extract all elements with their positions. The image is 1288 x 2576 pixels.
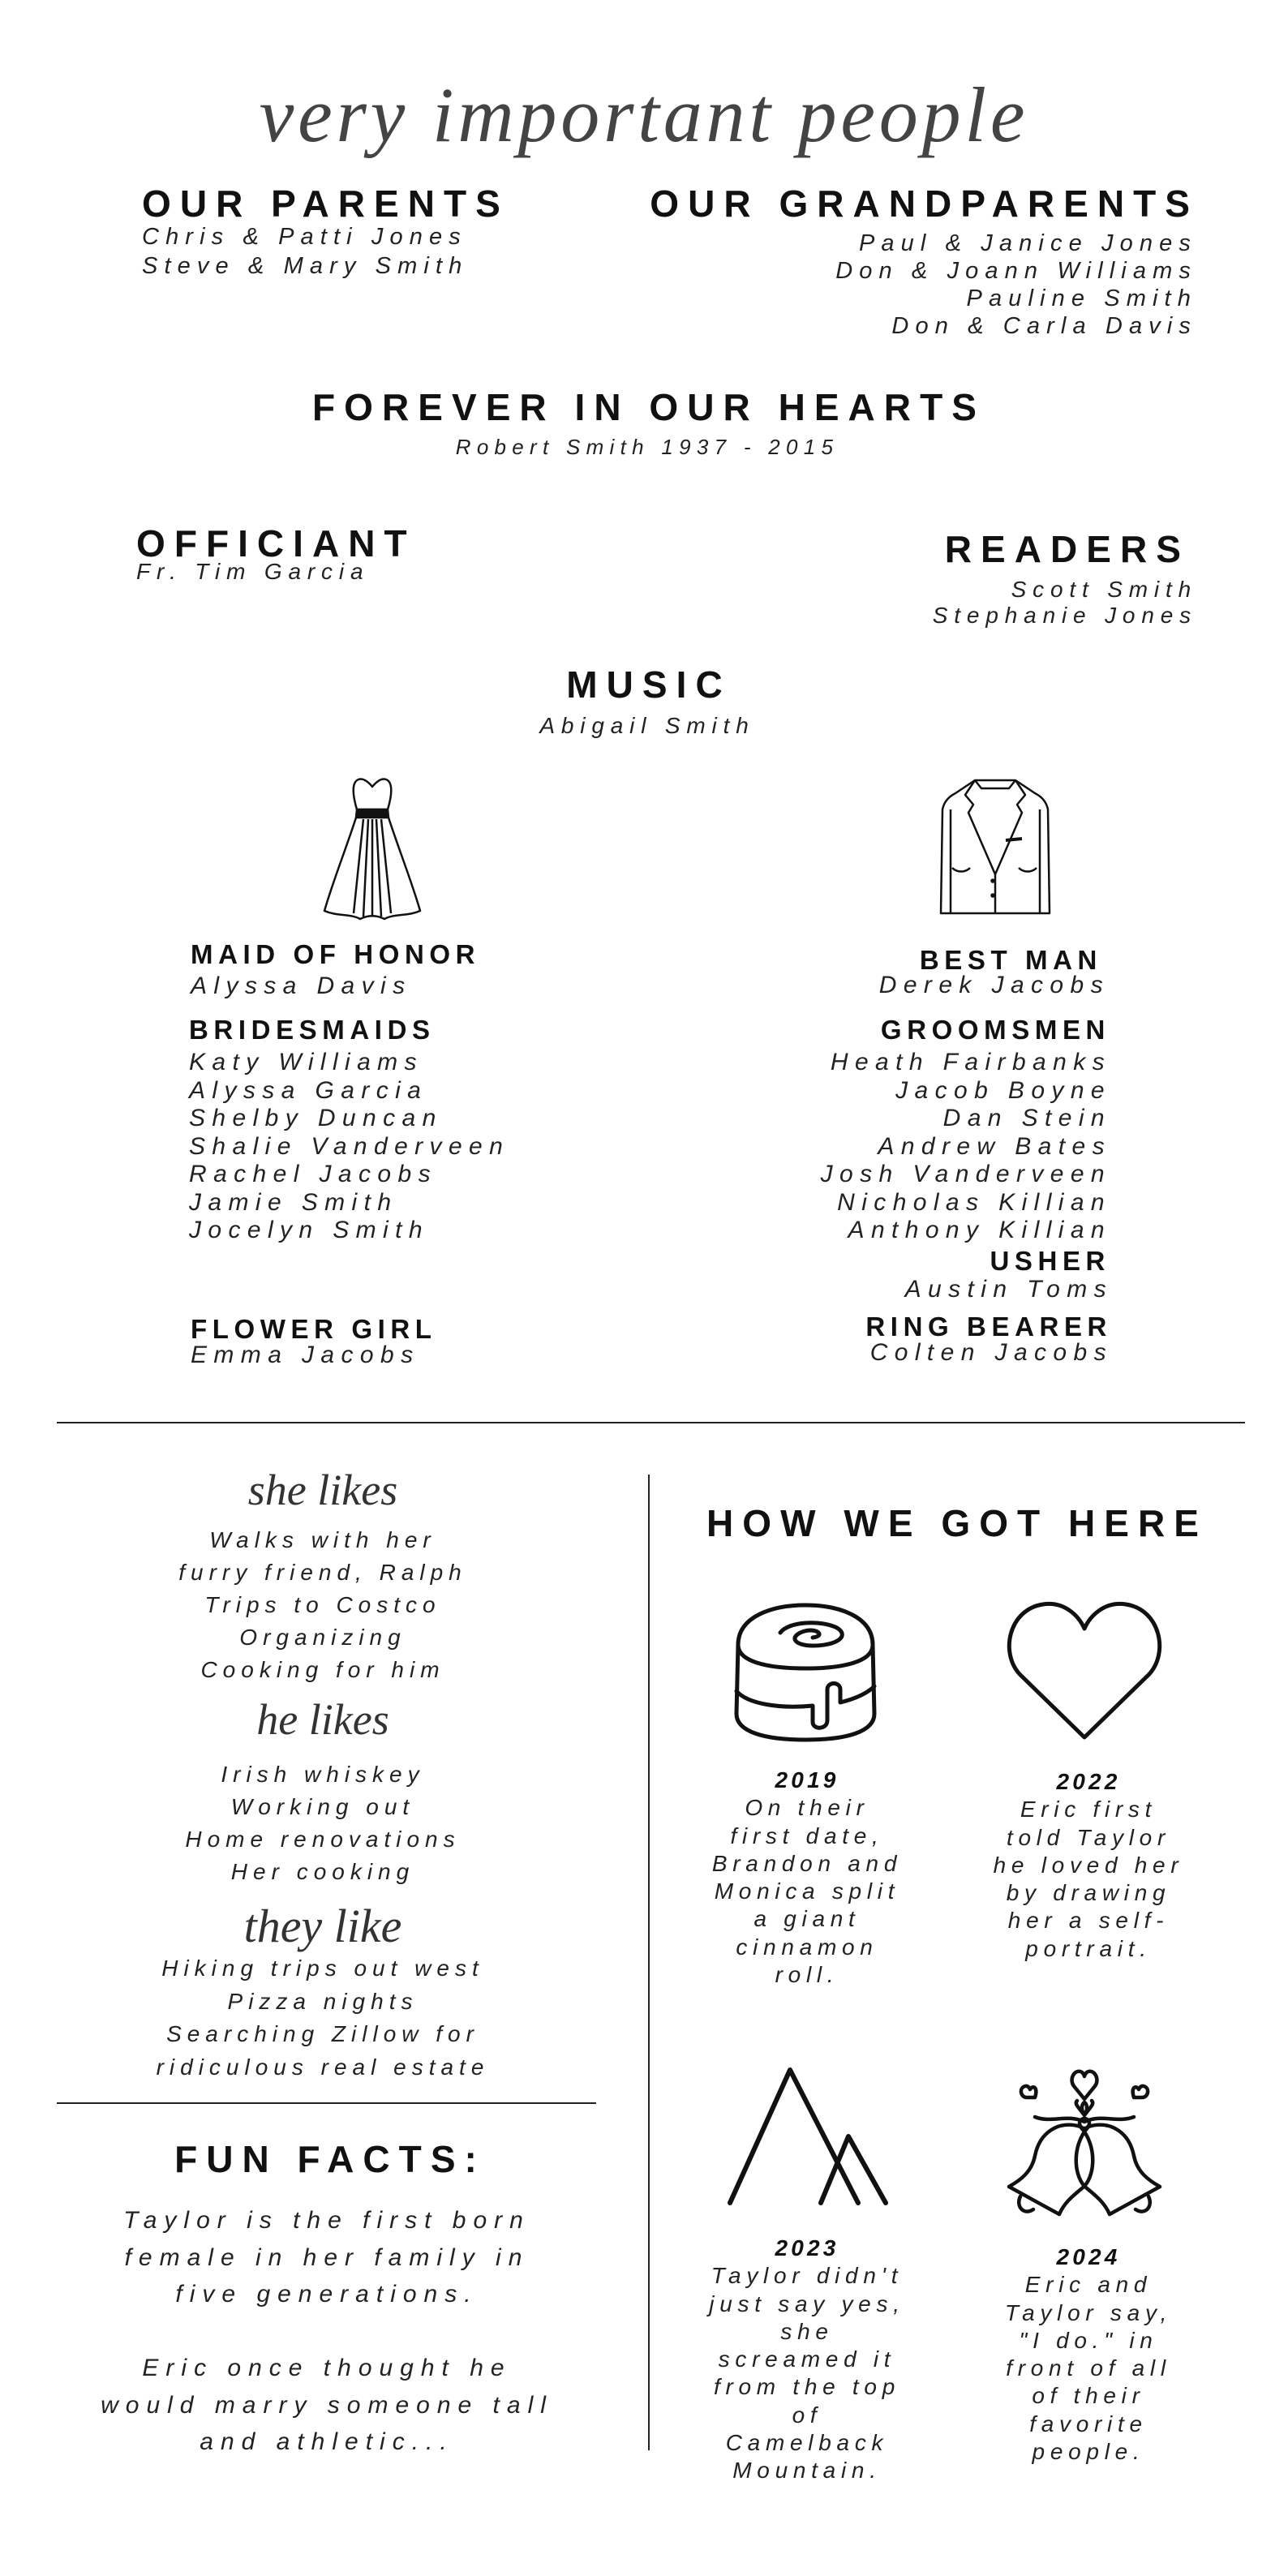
timeline: 2024: 2024 <box>1056 2244 1121 2269</box>
timeline: 2022 <box>994 1769 1183 1961</box>
icon: cinnamon roll <box>735 1603 876 1742</box>
timeline: 2024: Eric and <box>1025 2272 1152 2297</box>
heading: groomsmen: GROOMSMEN <box>881 1015 1110 1045</box>
text: readers names: Stephanie Jones <box>933 603 1197 628</box>
timeline: 2019: first date, <box>730 1823 884 1848</box>
heading: officiant: OFFICIANT <box>136 522 416 565</box>
text: groomsmen names: Dan Stein <box>943 1105 1111 1131</box>
heading: fun facts: FUN FACTS: <box>174 2138 486 2180</box>
text: bridesmaids names: Jocelyn Smith <box>189 1217 429 1243</box>
timeline: 2024: people. <box>1033 2439 1144 2464</box>
text: bridesmaids names: Shelby Duncan <box>189 1105 443 1131</box>
list: he likes: Irish whiskey <box>221 1762 425 1787</box>
timeline: 2022: her a self- <box>1008 1908 1169 1933</box>
timeline: 2019: Brandon and <box>712 1851 902 1876</box>
timeline: 2022: by drawing <box>1007 1880 1170 1905</box>
text: parents names: Steve & Mary Smith <box>142 253 468 279</box>
text: officiant name: Fr. Tim Garcia <box>136 559 369 584</box>
icon: heart <box>1007 1601 1161 1739</box>
text: grandparents names: Paul & Janice Jones <box>859 230 1197 256</box>
timeline: 2023: screamed it <box>719 2346 895 2372</box>
text: parents names <box>142 224 468 279</box>
text: readers names: Scott Smith <box>1011 577 1197 602</box>
text: fun facts: female in her family in <box>125 2243 529 2271</box>
timeline: 2019: roll. <box>775 1962 839 1987</box>
list: they like: Hiking trips out west <box>161 1956 484 1981</box>
text: best man name: Derek Jacobs <box>879 972 1110 998</box>
text: ring bearer name: Colten Jacobs <box>870 1339 1113 1366</box>
text: grandparents names: Pauline Smith <box>967 286 1197 311</box>
timeline: 2023: of <box>792 2402 822 2428</box>
text: groomsmen names <box>821 1049 1111 1243</box>
timeline: 2023: Mountain. <box>732 2458 882 2483</box>
list: she likes: Cooking for him <box>200 1657 445 1682</box>
timeline: 2019: On their <box>745 1795 869 1820</box>
timeline: 2022: told Taylor <box>1007 1825 1170 1850</box>
script heading: he likes: he likes <box>256 1695 389 1744</box>
text: bridesmaids names <box>188 1049 509 1243</box>
list: they like: ridiculous real estate <box>157 2054 489 2080</box>
list: he likes <box>185 1762 461 1884</box>
timeline: 2024 <box>1005 2244 1172 2464</box>
timeline: 2024: favorite <box>1029 2411 1148 2436</box>
heading: ring bearer: RING BEARER <box>865 1312 1112 1342</box>
text: bridesmaids names: Shalie Vanderveen <box>189 1132 509 1160</box>
text: maid of honor name: Alyssa Davis <box>191 972 412 999</box>
timeline: 2023: she <box>780 2319 834 2344</box>
heading: maid of honor: MAID OF HONOR <box>191 939 480 969</box>
timeline: 2019: cinnamon <box>736 1934 878 1960</box>
heading: best man: BEST MAN <box>920 945 1102 975</box>
text: parents names: Chris & Patti Jones <box>142 224 467 250</box>
timeline: 2024: "I do." in <box>1019 2328 1158 2353</box>
timeline: 2023: just say yes, <box>709 2291 905 2316</box>
list: they like <box>157 1956 489 2080</box>
list: she likes: Trips to Costco <box>204 1592 441 1617</box>
heading: readers: READERS <box>945 528 1190 570</box>
list: he likes: Home renovations <box>185 1827 461 1852</box>
list: he likes: Working out <box>231 1794 414 1819</box>
icon: wedding bells <box>1007 2070 1161 2216</box>
timeline: 2019: Monica split <box>715 1878 899 1904</box>
text: grandparents names: Don & Joann Williams <box>835 258 1197 284</box>
timeline: 2024: Taylor say, <box>1005 2300 1172 2325</box>
list: they like: Pizza nights <box>228 1989 418 2013</box>
timeline: 2019: a giant <box>753 1906 861 1931</box>
list: she likes: Walks with her <box>209 1527 436 1552</box>
timeline: 2023 <box>706 2235 905 2483</box>
icon: mountains <box>728 2067 888 2205</box>
panel: likes <box>157 1466 489 2080</box>
heading: music: MUSIC <box>566 663 732 706</box>
title: very important people <box>260 71 1028 158</box>
heading: our grandparents: OUR GRANDPARENTS <box>650 182 1199 225</box>
timeline: 2024: of their <box>1032 2383 1145 2408</box>
list: they like: Searching Zillow for <box>166 2021 479 2046</box>
text: bridesmaids names: Katy Williams <box>189 1049 423 1075</box>
text: groomsmen names: Josh Vanderveen <box>821 1161 1111 1187</box>
text: groomsmen names: Jacob Boyne <box>895 1077 1111 1103</box>
text: groomsmen names: Andrew Bates <box>878 1132 1111 1160</box>
script heading: they like: they like <box>244 1900 401 1952</box>
timeline: 2019 <box>712 1767 902 1987</box>
timeline: 2019: 2019 <box>775 1767 839 1792</box>
heading: flower girl: FLOWER GIRL <box>191 1314 437 1344</box>
heading: how we got here: HOW WE GOT HERE <box>706 1502 1208 1544</box>
text: fun facts <box>101 2207 553 2455</box>
timeline: 2023: Taylor didn't <box>711 2263 903 2288</box>
heading: bridesmaids: BRIDESMAIDS <box>189 1015 436 1045</box>
text: fun facts: five generations. <box>175 2281 479 2308</box>
text: readers names <box>933 577 1197 628</box>
list: she likes: Organizing <box>239 1625 406 1650</box>
text: usher name: Austin Toms <box>905 1276 1113 1303</box>
script heading: she likes: she likes <box>248 1466 397 1514</box>
timeline: 2022: portrait. <box>1025 1936 1152 1961</box>
text: bridesmaids names: Rachel Jacobs <box>189 1161 437 1187</box>
text: fun facts: would marry someone tall <box>101 2391 553 2419</box>
list: she likes: furry friend, Ralph <box>178 1560 467 1585</box>
heading: usher: USHER <box>990 1246 1110 1276</box>
text: flower girl name: Emma Jacobs <box>191 1342 419 1368</box>
text: grandparents names <box>835 230 1197 339</box>
timeline: 2023: Camelback <box>726 2430 888 2455</box>
text: fun facts: and athletic... <box>200 2428 454 2455</box>
timeline: 2022: Eric first <box>1020 1797 1157 1822</box>
timeline: 2024: front of all <box>1006 2355 1171 2381</box>
text: fun facts: Taylor is the first born <box>123 2207 530 2234</box>
timeline: 2023: 2023 <box>775 2235 839 2260</box>
heading: our parents: OUR PARENTS <box>142 182 509 225</box>
text: music name: Abigail Smith <box>539 713 755 738</box>
icon: suit jacket <box>939 779 1051 915</box>
text: groomsmen names: Nicholas Killian <box>837 1189 1111 1215</box>
text: bridesmaids names: Alyssa Garcia <box>189 1077 427 1103</box>
text: groomsmen names: Anthony Killian <box>848 1217 1111 1243</box>
text: bridesmaids names: Jamie Smith <box>189 1189 397 1215</box>
text: grandparents names: Don & Carla Davis <box>891 313 1197 339</box>
text: fun facts: Eric once thought he <box>142 2355 512 2381</box>
list: he likes: Her cooking <box>231 1859 414 1884</box>
list: she likes <box>178 1527 467 1682</box>
heading: forever in our hearts: FOREVER IN OUR HEARTS <box>312 386 985 428</box>
text: groomsmen names: Heath Fairbanks <box>831 1049 1111 1075</box>
timeline: 2022: he loved her <box>994 1853 1183 1878</box>
text: memorial: Robert Smith 1937 - 2015 <box>456 435 839 459</box>
icon: dress <box>323 778 422 920</box>
timeline: 2023: from the top <box>714 2374 900 2399</box>
timeline: 2022: 2022 <box>1056 1769 1121 1794</box>
